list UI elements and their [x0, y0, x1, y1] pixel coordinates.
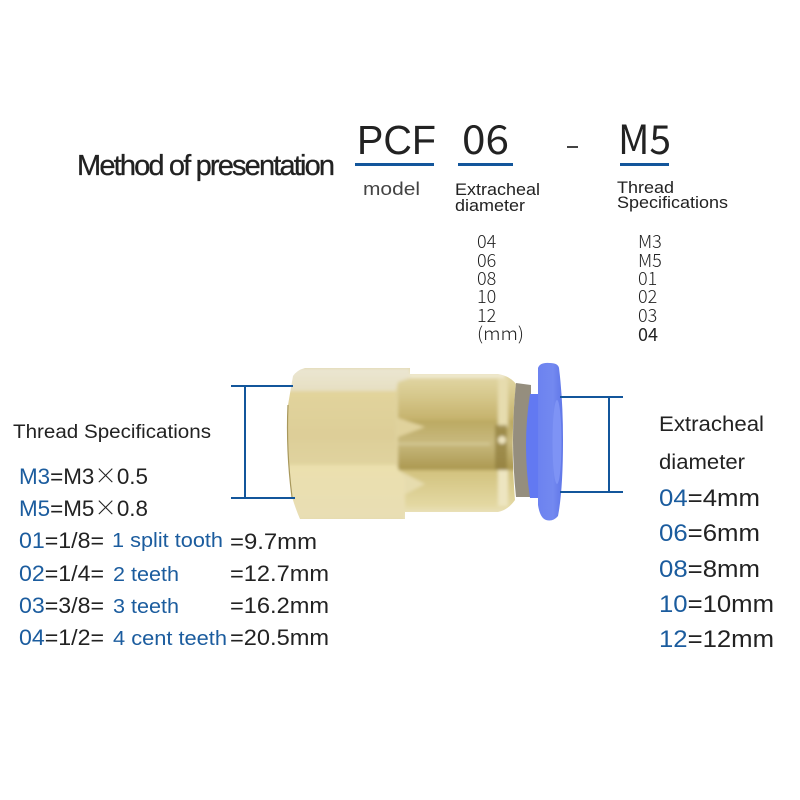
row 12: 12=12mm — [659, 626, 774, 653]
row 02: 2 teeth — [113, 564, 179, 586]
row 01: 1 split tooth — [112, 530, 223, 552]
model code: 06: 06 — [462, 108, 509, 166]
list: thread codes: M5 — [638, 247, 662, 273]
dimension bracket: diameter — [560, 396, 623, 493]
heading: Thread Specifications — [13, 422, 211, 443]
model code: M5: M5 — [618, 108, 671, 166]
heading: method of presentation: Method of presentation — [77, 150, 335, 182]
row 01: =9.7mm — [230, 529, 317, 554]
grey seal — [513, 383, 531, 497]
label: thread specifications: Thread — [617, 179, 674, 197]
model code: PCF: PCF — [357, 117, 436, 163]
label: model: model — [363, 178, 420, 199]
row 02 — [19, 561, 329, 586]
row 01: 01=1/8= — [19, 528, 104, 553]
list: thread codes: M3 — [638, 228, 662, 254]
heading: diameter — [659, 451, 745, 474]
panel: thread specifications — [13, 422, 329, 650]
row 03: 3 teeth — [113, 596, 179, 618]
blue flange — [538, 363, 563, 520]
row 02: 02=1/4= — [19, 561, 104, 586]
row 04: 04=4mm — [659, 485, 760, 512]
row 04: 04=1/2= — [19, 625, 104, 650]
heading: Extracheal — [659, 413, 764, 436]
row 03 — [19, 593, 329, 618]
row 04: =20.5mm — [230, 625, 329, 650]
row 01 — [19, 528, 317, 554]
label: thread specifications: Specifications — [617, 194, 728, 212]
label: extracheal diameter: diameter — [455, 197, 526, 215]
row 02: =12.7mm — [230, 561, 329, 586]
row 04 — [19, 625, 329, 650]
list: thread codes: 04 — [638, 321, 658, 347]
row 10: 10=10mm — [659, 591, 774, 618]
blue collar — [526, 394, 540, 498]
list: diameter codes: 10 — [477, 283, 496, 309]
nut facets — [396, 387, 516, 422]
row M5: M5=M5×0.8 — [19, 491, 148, 523]
row 08: 08=8mm — [659, 556, 760, 583]
model code: dash — [567, 146, 578, 148]
brass body — [288, 368, 516, 519]
dimension bracket: thread — [231, 385, 295, 499]
list: diameter codes: 12 — [477, 302, 496, 328]
row 06: 06=6mm — [659, 520, 760, 547]
label: thread specifications — [617, 179, 728, 212]
row 03: =16.2mm — [230, 593, 329, 618]
illustration: brass push-in fitting — [280, 360, 563, 525]
list: thread codes — [638, 228, 662, 347]
row 03: 03=3/8= — [19, 593, 104, 618]
left hex facets — [285, 368, 410, 391]
label: extracheal diameter: Extracheal — [455, 181, 540, 199]
list: thread codes: 02 — [638, 283, 657, 309]
list: diameter codes: (mm) — [477, 320, 524, 346]
label: extracheal diameter — [455, 181, 540, 215]
list: diameter codes: 04 — [477, 228, 497, 254]
left rim shadow — [288, 405, 292, 497]
heading — [659, 413, 764, 474]
row 04: 4 cent teeth — [113, 628, 227, 650]
panel: extracheal diameter — [659, 413, 774, 653]
list: diameter codes — [477, 228, 524, 346]
row M3: M3=M3×0.5 — [19, 459, 148, 491]
list: thread codes: 01 — [638, 265, 657, 291]
list: diameter codes: 06 — [477, 247, 496, 273]
list: thread codes: 03 — [638, 302, 657, 328]
list: diameter codes: 08 — [477, 265, 496, 291]
flange bore — [552, 400, 562, 484]
